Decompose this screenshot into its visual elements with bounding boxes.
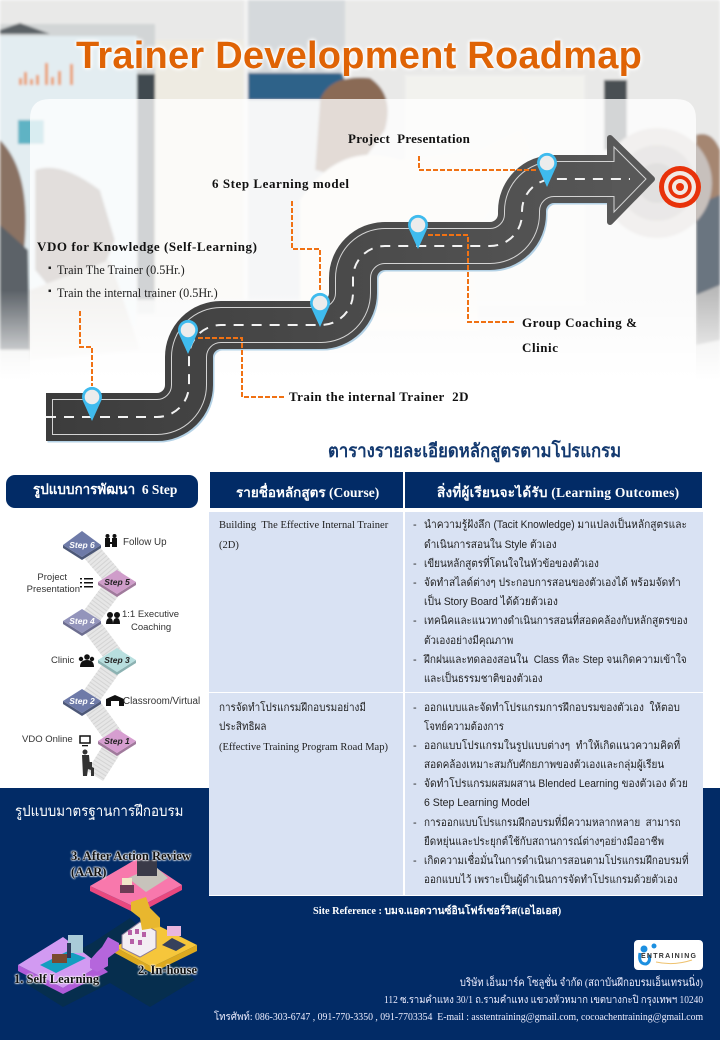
row 1 outcomes cell: - — [413, 615, 417, 627]
title: Trainer Development Roadmap — [76, 35, 642, 77]
icon: monitor — [80, 736, 90, 746]
label: train the internal trainer: Train the internal Trainer 2D — [289, 389, 469, 404]
label: project presentation: Presentation — [27, 584, 80, 595]
row 2 course cell: การจัดทำโปรแกรมฝึกอบรมอย่างมี — [219, 702, 366, 714]
icon: clinic group — [79, 654, 94, 667]
row 1 outcomes cell: จัดทำสไลด์ต่างๆ ประกอบการสอนของตัวเองได้ พร้อมจัดทำ — [424, 577, 681, 589]
row 1 outcomes cell: เขียนหลักสูตรที่โดนใจในหัวข้อของตัวเอง — [424, 558, 599, 570]
label: executive coaching — [122, 609, 179, 632]
platform 3: pink AAR — [90, 857, 182, 914]
pin 4 — [408, 215, 428, 249]
diagram: 6 step staircase — [22, 531, 200, 781]
road shadow — [48, 180, 614, 418]
step 3: Step 3 — [104, 655, 130, 665]
platform 2: yellow in-house — [115, 922, 197, 973]
background photo: training room — [0, 0, 720, 359]
step 5 — [98, 570, 136, 597]
row 2 outcomes cell: ออกแบบโปรแกรมในรูปแบบต่างๆ ทำให้เกิดแนวความคิดที่ — [424, 740, 680, 752]
label: classroom virtual: Classroom/Virtual — [123, 696, 200, 707]
row 1 outcomes cell: - — [413, 558, 417, 570]
panel: translucent white card — [30, 99, 696, 400]
table header: course — [210, 472, 403, 508]
site reference: Site Reference : บมจ.แอดวานซ์อินโฟร์เซอร์วิส(เอไอเอส) — [313, 906, 561, 917]
step 5: Step 5 — [104, 577, 130, 587]
navy bottom band — [0, 788, 720, 1040]
row 2 outcomes cell: ออกแบบไว้ เพราะเป็นผู้ดำเนินการจัดทำโปรแกรมด้วยตัวเอง — [424, 874, 678, 886]
table: course details — [209, 471, 703, 896]
row 1 outcomes cell: เทคนิคและแนวทางดำเนินการสอนที่สอดคล้องกับหลักสูตรของ — [424, 615, 688, 627]
contact details: โทรศัพท์: 086-303-6747 , 091-770-3350 , 091-7703354 E-mail : asstentraining@gmail.com, cocoachentraining@gmail.com — [214, 1012, 703, 1023]
step 6: Step 6 — [69, 540, 95, 550]
label: project presentation — [27, 572, 80, 595]
table header: learning outcomes — [405, 472, 702, 508]
row 2 outcomes cell: - — [413, 702, 417, 714]
roadmap: winding road with arrow — [46, 135, 701, 442]
row 1 outcomes cell: - — [413, 577, 417, 589]
orange leader: Group — [428, 235, 515, 322]
heading: table title: ตารางรายละเอียดหลักสูตรตามโปรแกรม — [328, 442, 621, 462]
label: executive coaching: 1:1 Executive — [122, 609, 179, 620]
icon: follow up — [105, 534, 117, 547]
row 2 course cell: ประสิทธิผล — [219, 721, 266, 733]
table header: learning outcomes: สิ่งที่ผู้เรียนจะได้รับ (Learning Outcomes) — [437, 485, 679, 500]
logo: entraining — [634, 940, 703, 970]
step 1 — [98, 729, 136, 756]
row 2 outcomes cell: โจทย์ความต้องการ — [424, 721, 504, 733]
contact details: บริษัท เอ็นมาร์ค โซลูชั่น จำกัด (สถาบันฝึกอบรมเอ็นเทรนนิ่ง) — [460, 977, 703, 989]
row 1 outcomes cell: - — [413, 519, 417, 531]
row 2 course cell — [209, 693, 403, 895]
row 1 outcomes cell: - — [413, 654, 417, 666]
row 1 outcomes cell: เป็น Story Board ได้ด้วยตัวเอง — [424, 596, 558, 608]
text block: VDO for knowledge: Train the internal trainer (0.5Hr.) — [57, 286, 218, 300]
row 2 outcomes cell: จัดทำโปรแกรมผสมผสาน Blended Learning ของตัวเอง ด้วย — [424, 778, 688, 790]
step 6 — [63, 531, 101, 560]
icon: classroom — [106, 695, 124, 706]
row 2 outcomes cell: สอดคล้องเหมาะสมกับศักยภาพของตัวเองและกลุ่มผู้เรียน — [424, 759, 664, 771]
row 2 outcomes cell: - — [413, 778, 417, 790]
platform shadows — [25, 918, 195, 1007]
row 2 outcomes cell: - — [413, 855, 417, 867]
pin 2 — [178, 320, 198, 354]
platform 1: purple self learning — [18, 935, 108, 994]
label: vdo online: VDO Online — [22, 734, 73, 745]
label: after action review: (AAR) — [71, 864, 106, 878]
label: after action review: 3. After Action Review — [71, 849, 191, 863]
row 1 outcomes cell: นำความรู้ฝังลึก (Tacit Knowledge) มาแปลงเป็นหลักสูตรและ — [424, 519, 687, 531]
label: group coaching and clinic — [522, 315, 637, 355]
pill heading: 6 step model: รูปแบบการพัฒนา 6 Step — [33, 483, 177, 498]
label: self learning: 1. Self Learning — [14, 972, 99, 986]
pin 3 — [310, 293, 330, 327]
row 2 outcomes cell: 6 Step Learning Model — [424, 797, 530, 809]
row 2 outcomes cell: - — [413, 740, 417, 752]
contact details: 112 ซ.รามคำแหง 30/1 ถ.รามคำแหง แขวงหัวหมาก เขตบางกะปิ กรุงเทพฯ 10240 — [384, 995, 703, 1006]
row 1 course cell: (2D) — [219, 540, 239, 551]
orange leader: VDO — [80, 311, 92, 386]
orange leader: Train — [198, 338, 285, 397]
step 1: Step 1 — [104, 736, 130, 746]
row 1 outcomes cell: ฝึกฝนและทดลองสอนใน Class ทีละ Step จนเกิดความเข้าใจ — [424, 654, 687, 666]
pin 5 — [537, 153, 557, 187]
label: in-house: 2. In-house — [138, 963, 197, 977]
icon: target — [659, 166, 701, 208]
icon: person climbing — [82, 750, 94, 776]
step 2: Step 2 — [69, 696, 95, 706]
contact details — [214, 974, 703, 1023]
road surface — [46, 138, 652, 417]
row 2 outcomes cell: ยืดหยุ่นและประยุกต์ใช้กับสถานการณ์ต่างๆอย่างมืออาชีพ — [424, 836, 664, 848]
logo: entraining: ENTRAINING — [641, 953, 697, 960]
diagram: isometric training platforms — [18, 858, 197, 1007]
orange leader: 6 Step — [292, 201, 320, 292]
label: project presentation: Project Presentation — [348, 131, 470, 146]
row 1 course cell — [209, 512, 403, 692]
row 1 course cell: Building The Effective Internal Trainer — [219, 520, 388, 531]
row 1 outcomes cell — [405, 512, 703, 692]
label: executive coaching: Coaching — [131, 622, 171, 632]
pin 1 — [82, 387, 102, 421]
label: group coaching and clinic: Clinic — [522, 340, 559, 355]
label: 6 step learning model: 6 Step Learning model — [212, 176, 350, 191]
label: project presentation: Project — [37, 572, 67, 583]
row 2 outcomes cell: เกิดความเชื่อมั่นในการดำเนินการสอนตามโปรแกรมฝึกอบรมที่ — [424, 855, 688, 867]
orange leader: Project — [419, 156, 538, 170]
table header: course: รายชื่อหลักสูตร (Course) — [236, 485, 379, 500]
stairs: purple — [90, 937, 119, 972]
text block: VDO for knowledge: Train The Trainer (0.5Hr.) — [57, 263, 185, 277]
step 4: Step 4 — [69, 616, 95, 626]
step 4 — [63, 609, 101, 636]
stairs — [88, 548, 117, 776]
text block: VDO for knowledge — [37, 239, 257, 300]
step 2 — [63, 689, 101, 716]
heading: training standard: รูปแบบมาตรฐานการฝึกอบรม — [15, 804, 183, 820]
row 1 outcomes cell: และเป็นธรรมชาติของตัวเอง — [424, 673, 542, 685]
icon: checklist — [80, 578, 93, 588]
label: follow up: Follow Up — [123, 537, 167, 548]
text block: VDO for knowledge: ▪ — [48, 286, 52, 297]
row 2 outcomes cell: ออกแบบและจัดทำโปรแกรมการฝึกอบรมของตัวเอง ให้ตอบ — [424, 702, 680, 714]
row 1 outcomes cell: ตัวเองอย่างมีคุณภาพ — [424, 635, 513, 647]
pill heading: 6 step model — [6, 475, 198, 508]
row 2 outcomes cell: - — [413, 817, 417, 829]
row 2 course cell: (Effective Training Program Road Map) — [219, 742, 388, 753]
row 1 outcomes cell: ดำเนินการสอนใน Style ตัวเอง — [424, 539, 557, 551]
label: clinic: Clinic — [51, 655, 74, 666]
icon: coaching people — [106, 612, 120, 624]
road centre dashes — [46, 179, 630, 417]
text block: VDO for knowledge: VDO for Knowledge (Self-Learning) — [37, 239, 257, 254]
text block: VDO for knowledge: ▪ — [48, 263, 52, 274]
label: group coaching and clinic: Group Coaching & — [522, 315, 637, 330]
step 3 — [98, 648, 136, 675]
stairs: yellow — [131, 897, 160, 930]
label: after action review — [70, 849, 192, 880]
row 2 outcomes cell — [405, 693, 703, 895]
row 2 outcomes cell: การออกแบบโปรแกรมฝึกอบรมที่มีความหลากหลาย สามารถ — [424, 817, 681, 829]
